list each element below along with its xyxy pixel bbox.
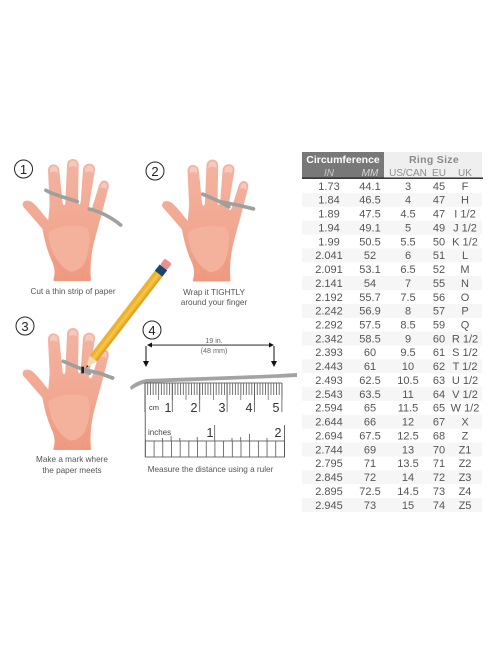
table rows: Z2 (459, 458, 471, 470)
table rows: 6 (405, 250, 411, 262)
table rows: 12 (402, 417, 414, 429)
table rows: 2.192 (315, 292, 343, 304)
arrow: right drop marker (271, 346, 277, 367)
table rows: W 1/2 (451, 403, 479, 415)
table rows: 46.5 (359, 195, 381, 207)
ruler: cm (149, 403, 159, 412)
table rows: 6.5 (400, 264, 416, 276)
table rows: 72.5 (359, 486, 381, 498)
table rows: U 1/2 (452, 375, 478, 387)
icon: step number 2 (146, 162, 164, 180)
table rows: 11.5 (398, 403, 418, 415)
table rows: 53.1 (359, 264, 381, 276)
table row stripes (302, 193, 482, 512)
table header (302, 152, 483, 179)
caption: step 3 (36, 455, 108, 475)
table header: Circumference (306, 154, 380, 166)
table rows: 2.242 (315, 306, 343, 318)
arrow: left drop marker (143, 346, 149, 367)
table rows: 68 (433, 430, 445, 442)
icon: step number 2: 2 (151, 164, 159, 179)
table rows: 61 (364, 361, 376, 373)
table rows: J 1/2 (453, 222, 477, 234)
table rows: 15 (402, 500, 414, 512)
table rows: Z1 (459, 444, 471, 456)
table rows: O (461, 292, 470, 304)
panel: step 4 measure with a ruler (130, 321, 297, 474)
table rows: 56 (433, 292, 445, 304)
table rows: Z (462, 430, 469, 442)
table rows: 5 (405, 222, 411, 234)
table rows: 62 (433, 361, 445, 373)
table rows: 47 (433, 208, 445, 220)
table rows: 52 (364, 250, 376, 262)
table rows: L (462, 250, 468, 262)
table rows: 72 (433, 472, 445, 484)
table rows: 54 (364, 278, 376, 290)
table rows: 60 (433, 333, 445, 345)
table rows: 8.5 (400, 320, 416, 332)
icon: step number 4: 4 (148, 323, 156, 338)
table rows: 70 (433, 444, 445, 456)
table rows: F (462, 181, 469, 193)
caption: step 3: the paper meets (42, 466, 102, 475)
table rows: 2.694 (315, 430, 343, 442)
table rows: P (461, 306, 469, 318)
label: measured length (201, 336, 227, 355)
table rows: 60 (364, 347, 376, 359)
arrow: measured distance (147, 342, 274, 348)
ruler: 2 (275, 426, 282, 440)
table rows: 2.744 (315, 444, 343, 456)
caption: step 3: Make a mark where (36, 455, 108, 464)
table rows: M (460, 264, 470, 276)
table rows: 2.493 (315, 375, 343, 387)
table rows: 65 (433, 403, 445, 415)
table rows: 56.9 (359, 306, 381, 318)
icon: step number 4 (143, 321, 161, 339)
table rows: 72 (364, 472, 376, 484)
table rows: 14.5 (397, 486, 419, 498)
table header: UK (458, 168, 472, 179)
table rows: 9.5 (400, 347, 416, 359)
table rows: 47 (433, 195, 445, 207)
panel: step 2 wrap tightly (146, 160, 253, 307)
table rows: 47.5 (359, 208, 381, 220)
table rows: 50.5 (359, 236, 381, 248)
table rows: 2.091 (315, 264, 343, 276)
table rows: 2.443 (315, 361, 343, 373)
table rows: 49.1 (359, 222, 381, 234)
panel: step 1 cut a strip of paper (14, 160, 121, 296)
table rows: 8 (405, 306, 411, 318)
table rows: 14 (402, 472, 414, 484)
table rows: 5.5 (400, 236, 416, 248)
table rows: 2.795 (315, 458, 343, 470)
table rows: 67 (433, 417, 445, 429)
table rows: Z5 (459, 500, 471, 512)
ruler: 5 (273, 401, 280, 415)
ruler: 3 (219, 401, 226, 415)
table rows: T 1/2 (453, 361, 477, 373)
table rows: 57 (433, 306, 445, 318)
ruler (144, 383, 285, 457)
table rows: 49 (433, 222, 445, 234)
table rows: 59 (433, 320, 445, 332)
table rows: 57.5 (359, 320, 381, 332)
icon: pencil (82, 258, 172, 371)
table rows: 55.7 (359, 292, 381, 304)
icon: hand with wrapped paper (163, 160, 253, 280)
ruler: 1 (207, 426, 214, 440)
table rows: 58.5 (359, 333, 381, 345)
ruler: 1 (165, 401, 172, 415)
table rows: Z3 (459, 472, 471, 484)
table rows: 62.5 (359, 375, 381, 387)
table rows: 69 (364, 444, 376, 456)
ruler: inches (148, 428, 171, 437)
table rows: 71 (364, 458, 376, 470)
table rows: 73 (433, 486, 445, 498)
table rows: N (461, 278, 469, 290)
caption: step 2: Wrap it TIGHTLY (183, 288, 245, 297)
table rows: 73 (364, 500, 376, 512)
table rows: 7.5 (400, 292, 416, 304)
table rows: 4 (405, 195, 411, 207)
table rows: 10 (402, 361, 414, 373)
table rows: X (461, 417, 469, 429)
table rows: 1.89 (318, 208, 340, 220)
table rows (315, 181, 479, 512)
table rows: 2.895 (315, 486, 343, 498)
icon: hand with paper and mark (24, 329, 113, 449)
table rows: 74 (433, 500, 445, 512)
table rows: 2.845 (315, 472, 343, 484)
caption: step 2 (181, 288, 247, 307)
table rows: 61 (433, 347, 445, 359)
table rows: 55 (433, 278, 445, 290)
table rows: Z4 (459, 486, 471, 498)
table rows: 1.94 (318, 222, 340, 234)
ruler: 4 (246, 401, 253, 415)
icon: step number 1: 1 (20, 162, 27, 177)
table header: EU (432, 168, 446, 179)
panel: ring size table (302, 152, 483, 512)
table rows: 66 (364, 417, 376, 429)
table rows: 2.644 (315, 417, 343, 429)
table rows: I 1/2 (454, 208, 476, 220)
table rows: 1.99 (318, 236, 340, 248)
icon: step number 3: 3 (21, 319, 29, 334)
table rows: 63 (433, 375, 445, 387)
table rows: 65 (364, 403, 376, 415)
table header: IN (324, 168, 335, 179)
table rows: R 1/2 (452, 333, 478, 345)
icon: step number 3 (16, 317, 34, 335)
table rows: 1.84 (318, 195, 340, 207)
table header: Ring Size (409, 154, 459, 166)
table rows: 2.543 (315, 389, 343, 401)
table header: MM (362, 168, 379, 179)
table rows: 4.5 (400, 208, 416, 220)
caption: step 4: Measure the distance using a ruler (148, 465, 274, 474)
table rows: 50 (433, 236, 445, 248)
table rows: 2.945 (315, 500, 343, 512)
table rows: 2.342 (315, 333, 343, 345)
table header: US/CAN (389, 168, 427, 179)
table rows: 1.73 (318, 181, 340, 193)
table rows: 2.393 (315, 347, 343, 359)
table rows: 10.5 (397, 375, 419, 387)
label: measured length: 19 in. (205, 336, 223, 345)
table rows: 9 (405, 333, 411, 345)
table rows: 13.5 (397, 458, 419, 470)
table rows: S 1/2 (452, 347, 478, 359)
table rows: 45 (433, 181, 445, 193)
table rows: 12.5 (397, 430, 419, 442)
icon: hand with paper strip (24, 160, 121, 280)
paper strip on ruler (130, 373, 297, 390)
ruler: 2 (191, 401, 198, 415)
caption: step 1: Cut a thin strip of paper (30, 287, 116, 296)
table rows: 2.041 (315, 250, 343, 262)
table rows: 3 (405, 181, 411, 193)
table rows: 51 (433, 250, 445, 262)
table rows: V 1/2 (452, 389, 478, 401)
table rows: 64 (433, 389, 445, 401)
table rows: 2.141 (315, 278, 343, 290)
table rows: 11 (402, 389, 414, 401)
table rows: Q (461, 320, 470, 332)
table rows: 67.5 (359, 430, 381, 442)
table rows: 7 (405, 278, 411, 290)
table rows: 63.5 (359, 389, 381, 401)
table rows: K 1/2 (452, 236, 478, 248)
label: measured length: (48 mm) (201, 346, 227, 355)
table rows: 52 (433, 264, 445, 276)
table rows: 13 (402, 444, 414, 456)
table rows: 71 (433, 458, 445, 470)
table rows: H (461, 195, 469, 207)
table rows: 2.594 (315, 403, 343, 415)
caption: step 2: around your finger (181, 298, 247, 307)
table rows: 44.1 (359, 181, 381, 193)
panel: step 3 mark where the paper meets (16, 258, 172, 475)
table rows: 2.292 (315, 320, 343, 332)
